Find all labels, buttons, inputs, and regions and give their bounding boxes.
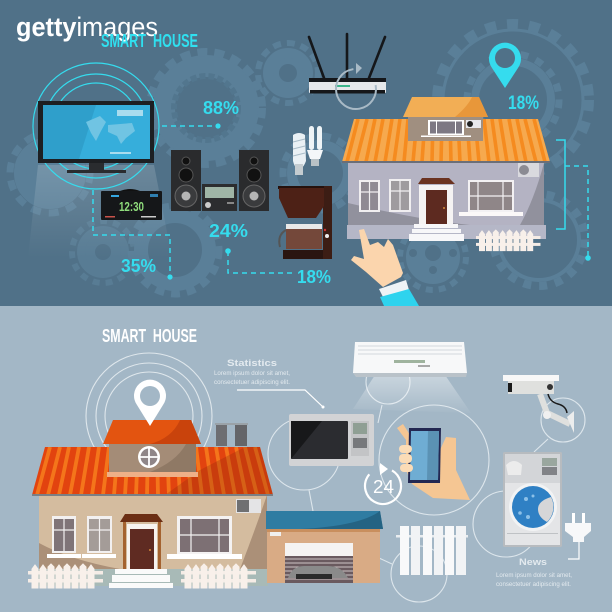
- steps: [409, 224, 464, 241]
- garage wall: [267, 529, 380, 583]
- wall shadow: [39, 495, 267, 569]
- news callout: consectetuer adipiscing elit.: [496, 581, 571, 588]
- icon: security camera: [503, 375, 574, 433]
- icon: air conditioner: [353, 342, 467, 377]
- icon: hand holding phone: [397, 424, 470, 500]
- panel: top dark background: [0, 0, 612, 306]
- signal rings around house pin: [86, 353, 212, 479]
- left window: [47, 516, 81, 558]
- round window: [138, 446, 160, 468]
- icon: wifi router: [309, 34, 386, 112]
- title: bottom smart house: SMART HOUSE: [102, 326, 197, 346]
- icon: monitor: [38, 101, 154, 173]
- icon: air conditioner beam: [353, 375, 471, 413]
- icon: washing machine: [503, 452, 562, 547]
- icon: power plug: [565, 513, 591, 559]
- foundation: [347, 225, 546, 239]
- dormer window: [421, 120, 471, 137]
- icon: alarm clock: 12:30: [119, 200, 144, 214]
- wall: [39, 495, 267, 569]
- icon: microwave: [289, 414, 374, 466]
- steps: [109, 569, 173, 588]
- connectors: dashed statistic lines: [93, 123, 591, 280]
- icon: 24 hour cycle: 24: [373, 477, 394, 497]
- main roof: [32, 447, 273, 495]
- panel: bottom light background: [0, 306, 612, 612]
- small camera: [270, 532, 281, 536]
- statistics callout: Lorem ipsum dolor sit amet,: [214, 370, 290, 377]
- icon: 24 hour cycle: [358, 461, 408, 511]
- percentage labels top: 88%: [203, 98, 239, 118]
- icon: location pin top: [489, 43, 521, 88]
- dormer roof: [103, 420, 201, 444]
- light beam under monitor: [28, 165, 172, 258]
- icon: pointing hand: [351, 229, 419, 306]
- large window: [459, 180, 523, 216]
- right fence: [181, 564, 256, 588]
- foundation: [33, 569, 268, 586]
- wall AC unit: [518, 163, 539, 177]
- watermark logo: gettyimages: [16, 12, 158, 42]
- house: bottom red: [28, 380, 273, 588]
- percentage labels top: 18%: [297, 267, 331, 287]
- icon: coffee machine: [278, 186, 332, 259]
- statistics callout: Statistics: [227, 358, 277, 369]
- garage roof: [266, 511, 383, 529]
- news callout: Lorem ipsum dolor sit amet,: [496, 572, 572, 579]
- dormer AC unit: [466, 120, 481, 128]
- news callout: News: [519, 557, 547, 568]
- left window: [359, 180, 380, 212]
- icon: radiator: [396, 526, 468, 575]
- middle window: [82, 516, 116, 558]
- wall shadow: [348, 163, 544, 225]
- title: top smart house: SMART HOUSE: [101, 31, 198, 51]
- chimneys: [215, 423, 248, 446]
- icon: signal rings around monitor: [33, 63, 159, 189]
- garage: [266, 511, 383, 583]
- statistics callout: consectetuer adipiscing elit.: [214, 379, 290, 386]
- icon: stereo speakers: [171, 150, 269, 211]
- dormer roof: [403, 97, 488, 117]
- dormer wall: [408, 117, 483, 141]
- background gears top: [10, 24, 589, 294]
- icon: energy saving bulbs: [293, 126, 323, 175]
- house: top orange: [342, 97, 550, 251]
- connector circles: [268, 360, 585, 602]
- location pin: [134, 380, 166, 426]
- percentage labels top: 24%: [209, 221, 248, 241]
- percentage labels top: 18%: [508, 93, 539, 114]
- statistics callout: [214, 358, 324, 408]
- wall AC unit: [236, 499, 261, 513]
- wall: [348, 163, 544, 225]
- dormer wall: [109, 444, 196, 472]
- left fence: [28, 564, 103, 588]
- door: [418, 178, 455, 225]
- middle window: [389, 179, 411, 212]
- white fence: [476, 230, 540, 251]
- icon: alarm clock: [101, 189, 162, 220]
- percentage labels top: [121, 93, 539, 287]
- main roof: [342, 119, 550, 162]
- garage door with car: [285, 543, 353, 583]
- door: [120, 514, 163, 569]
- large window: [167, 516, 242, 559]
- percentage labels top: 35%: [121, 256, 156, 276]
- news callout: [496, 557, 572, 588]
